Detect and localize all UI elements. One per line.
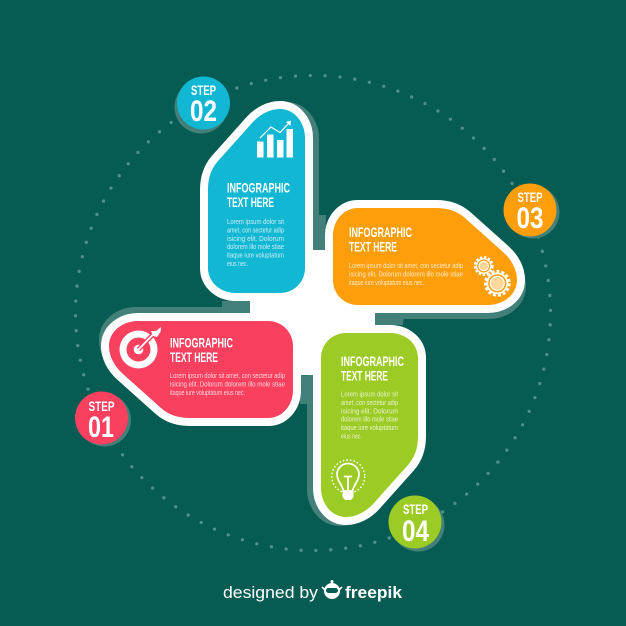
panel: step 01 pink xyxy=(109,321,293,418)
body text: dolorem illo mole stiae xyxy=(227,242,284,251)
heading: TEXT HERE xyxy=(170,349,218,365)
icon: bar chart xyxy=(257,120,293,158)
central white hub xyxy=(250,250,375,375)
body text xyxy=(341,390,399,440)
body text: itaque iure voluptatum eius nec. xyxy=(170,388,245,397)
body text: isicing elit. Dolorum dolorem illo mole stiae xyxy=(349,270,463,278)
panel: step 03 orange xyxy=(333,208,517,305)
badge: step 01: STEP xyxy=(88,398,114,414)
icon: light bulb xyxy=(332,460,365,500)
panel: step 04 green xyxy=(321,333,418,517)
heading xyxy=(227,180,290,210)
body text: amet, con sectetur adip xyxy=(341,398,398,407)
badge: step 01 xyxy=(75,392,131,446)
heading xyxy=(349,224,412,254)
badge: step 04: STEP xyxy=(403,501,428,517)
body text: isicing elit. Dolorum xyxy=(227,234,284,243)
heading: TEXT HERE xyxy=(349,238,397,254)
badge: step 04: 04 xyxy=(402,515,429,548)
body text xyxy=(170,371,285,397)
body text: Lorem ipsum dolor sit amet, con sectetur adip xyxy=(170,371,285,380)
badge: step 02: STEP xyxy=(191,82,216,98)
footer: freepik credit xyxy=(223,580,403,602)
body text: eius nec. xyxy=(341,432,362,440)
body text: Lorem ipsum dolor sit xyxy=(341,390,399,398)
icon: freepik mascot xyxy=(322,580,342,599)
body text: Lorem ipsum dolor sit amet, con sectetur adip xyxy=(349,261,463,270)
heading xyxy=(170,335,233,365)
heading: INFOGRAPHIC xyxy=(341,353,404,369)
body text: itaque iure voluptatum xyxy=(227,251,284,260)
body text xyxy=(349,261,463,287)
body text: Lorem ipsum dolor sit xyxy=(227,217,285,226)
body text: isicing elit. Dolorum xyxy=(341,406,398,415)
body text: itaque iure voluptatum eius nec. xyxy=(349,278,424,287)
heading: INFOGRAPHIC xyxy=(227,180,290,196)
badge: step 01: 01 xyxy=(88,411,114,444)
body text: amet, con sectetur adip xyxy=(227,225,284,234)
heading: TEXT HERE xyxy=(227,194,274,210)
heading: INFOGRAPHIC xyxy=(170,335,233,351)
badge: step 03 xyxy=(504,184,560,238)
body text: dolorem illo mole stiae xyxy=(341,415,398,424)
panel shadows xyxy=(107,110,518,518)
footer: freepik credit: freepik xyxy=(345,583,403,602)
body text: eius nec. xyxy=(227,259,248,268)
badge: step 02 xyxy=(174,76,230,134)
badge: step 04 xyxy=(388,496,444,552)
footer: freepik credit: designed by xyxy=(223,584,319,602)
badge: step 03: 03 xyxy=(516,202,544,235)
icon: target xyxy=(120,327,161,368)
icon: gears xyxy=(475,257,509,295)
badge: step 02: 02 xyxy=(190,95,217,128)
body text: itaque iure voluptatum xyxy=(341,423,398,432)
connector strips xyxy=(222,215,404,404)
heading: TEXT HERE xyxy=(341,367,388,383)
body text xyxy=(227,217,285,268)
panel: step 02 blue xyxy=(208,109,305,293)
heading: INFOGRAPHIC xyxy=(349,224,412,240)
heading xyxy=(341,353,404,383)
body text: isicing elit. Dolorum dolorem illo mole stiae xyxy=(170,380,285,388)
badge: step 03: STEP xyxy=(518,189,542,205)
